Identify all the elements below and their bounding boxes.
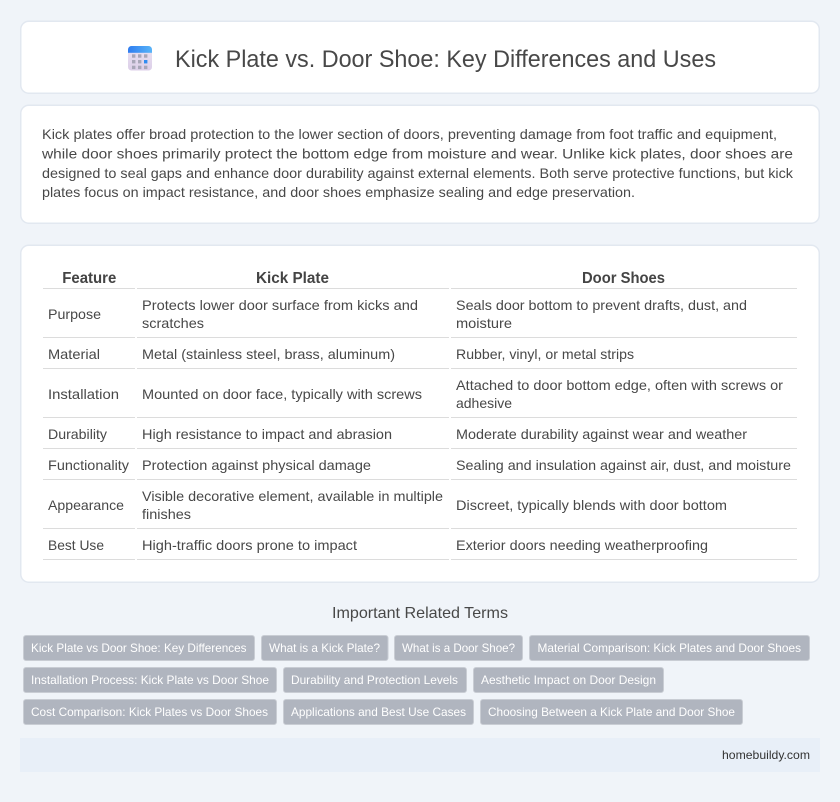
row: best use <box>48 537 708 553</box>
row: durability: High resistance to impact and abrasion <box>142 426 392 442</box>
row: appearance: finishes <box>142 506 191 522</box>
tag: What is a Door Shoe? <box>402 641 515 655</box>
panel: comparison table <box>21 245 819 582</box>
row: best use: High-traffic doors prone to impact <box>142 537 357 553</box>
description text: plates focus on impact resistance, and door shoes emphasize sealing and edge preservation. <box>42 184 635 200</box>
row: best use: Exterior doors needing weatherproofing <box>456 537 708 553</box>
row: functionality: Functionality <box>48 457 129 473</box>
tag: Aesthetic Impact on Door Design <box>481 673 656 687</box>
tag: Material Comparison: Kick Plates and Door Shoes <box>538 641 801 655</box>
footer source: homebuildy.com <box>722 748 810 762</box>
row: purpose: scratches <box>142 315 204 331</box>
tag <box>480 700 742 724</box>
row: durability: Durability <box>48 426 107 442</box>
row: appearance: Appearance <box>48 497 124 513</box>
row: purpose: moisture <box>456 315 512 331</box>
tag <box>284 700 474 724</box>
description text <box>41 126 794 200</box>
row: installation <box>48 377 783 411</box>
related terms tags <box>24 636 810 724</box>
description text: Kick plates offer broad protection to the lower section of doors, preventing damage from foot traffic and equipment, <box>42 126 777 142</box>
row: material: Metal (stainless steel, brass, aluminum) <box>142 346 395 362</box>
tag: Durability and Protection Levels <box>291 673 458 687</box>
tag: Cost Comparison: Kick Plates vs Door Shoes <box>31 705 268 719</box>
row: best use: Best Use <box>48 537 104 553</box>
footer bar <box>20 738 820 772</box>
tag: Kick Plate vs Door Shoe: Key Differences <box>31 641 246 655</box>
header panel <box>21 21 819 93</box>
table header: Kick Plate <box>256 270 329 287</box>
row: functionality <box>48 457 791 473</box>
row: purpose: Purpose <box>48 306 101 322</box>
heading: important related terms: Important Related Terms <box>332 605 508 622</box>
row: functionality: Protection against physical damage <box>142 457 371 473</box>
panel: description <box>21 105 819 223</box>
table header: Feature <box>62 270 117 287</box>
description text: while door shoes primarily protect the bottom edge from moisture and wear. Unlike kick plates, door shoes are <box>41 146 793 162</box>
tag <box>24 668 276 692</box>
row: installation: Attached to door bottom edge, often with screws or <box>456 377 783 393</box>
tag: Installation Process: Kick Plate vs Door Shoe <box>31 673 269 687</box>
tag: Choosing Between a Kick Plate and Door Shoe <box>488 705 735 719</box>
tag <box>530 636 810 660</box>
row: material: Material <box>48 346 100 362</box>
row: purpose: Seals door bottom to prevent drafts, dust, and <box>456 297 747 313</box>
title: Kick Plate vs. Door Shoe: Key Differences and Uses <box>175 46 716 73</box>
tag <box>394 636 522 660</box>
row: durability: Moderate durability against wear and weather <box>456 426 747 442</box>
row: purpose <box>48 297 747 331</box>
description text: designed to seal gaps and enhance door durability against external elements. Both serve protective functions, but kick <box>42 165 794 181</box>
row: purpose: Protects lower door surface from kicks and <box>142 297 418 313</box>
row: appearance: Visible decorative element, available in multiple <box>142 488 443 504</box>
row: appearance <box>48 488 727 522</box>
table header <box>62 270 665 287</box>
table header: Door Shoes <box>582 270 665 287</box>
row: installation: Mounted on door face, typically with screws <box>142 386 422 402</box>
tag: Applications and Best Use Cases <box>291 705 466 719</box>
row: material <box>48 346 634 362</box>
tag <box>474 668 664 692</box>
row: functionality: Sealing and insulation against air, dust, and moisture <box>456 457 791 473</box>
row: material: Rubber, vinyl, or metal strips <box>456 346 634 362</box>
row: installation: Installation <box>48 386 119 402</box>
row: appearance: Discreet, typically blends with door bottom <box>456 497 727 513</box>
row: durability <box>48 426 747 442</box>
tag <box>284 668 466 692</box>
tag <box>262 636 388 660</box>
row: installation: adhesive <box>456 395 512 411</box>
tag <box>24 700 276 724</box>
icon: calendar <box>128 46 152 70</box>
tag: What is a Kick Plate? <box>269 641 380 655</box>
tag <box>24 636 254 660</box>
